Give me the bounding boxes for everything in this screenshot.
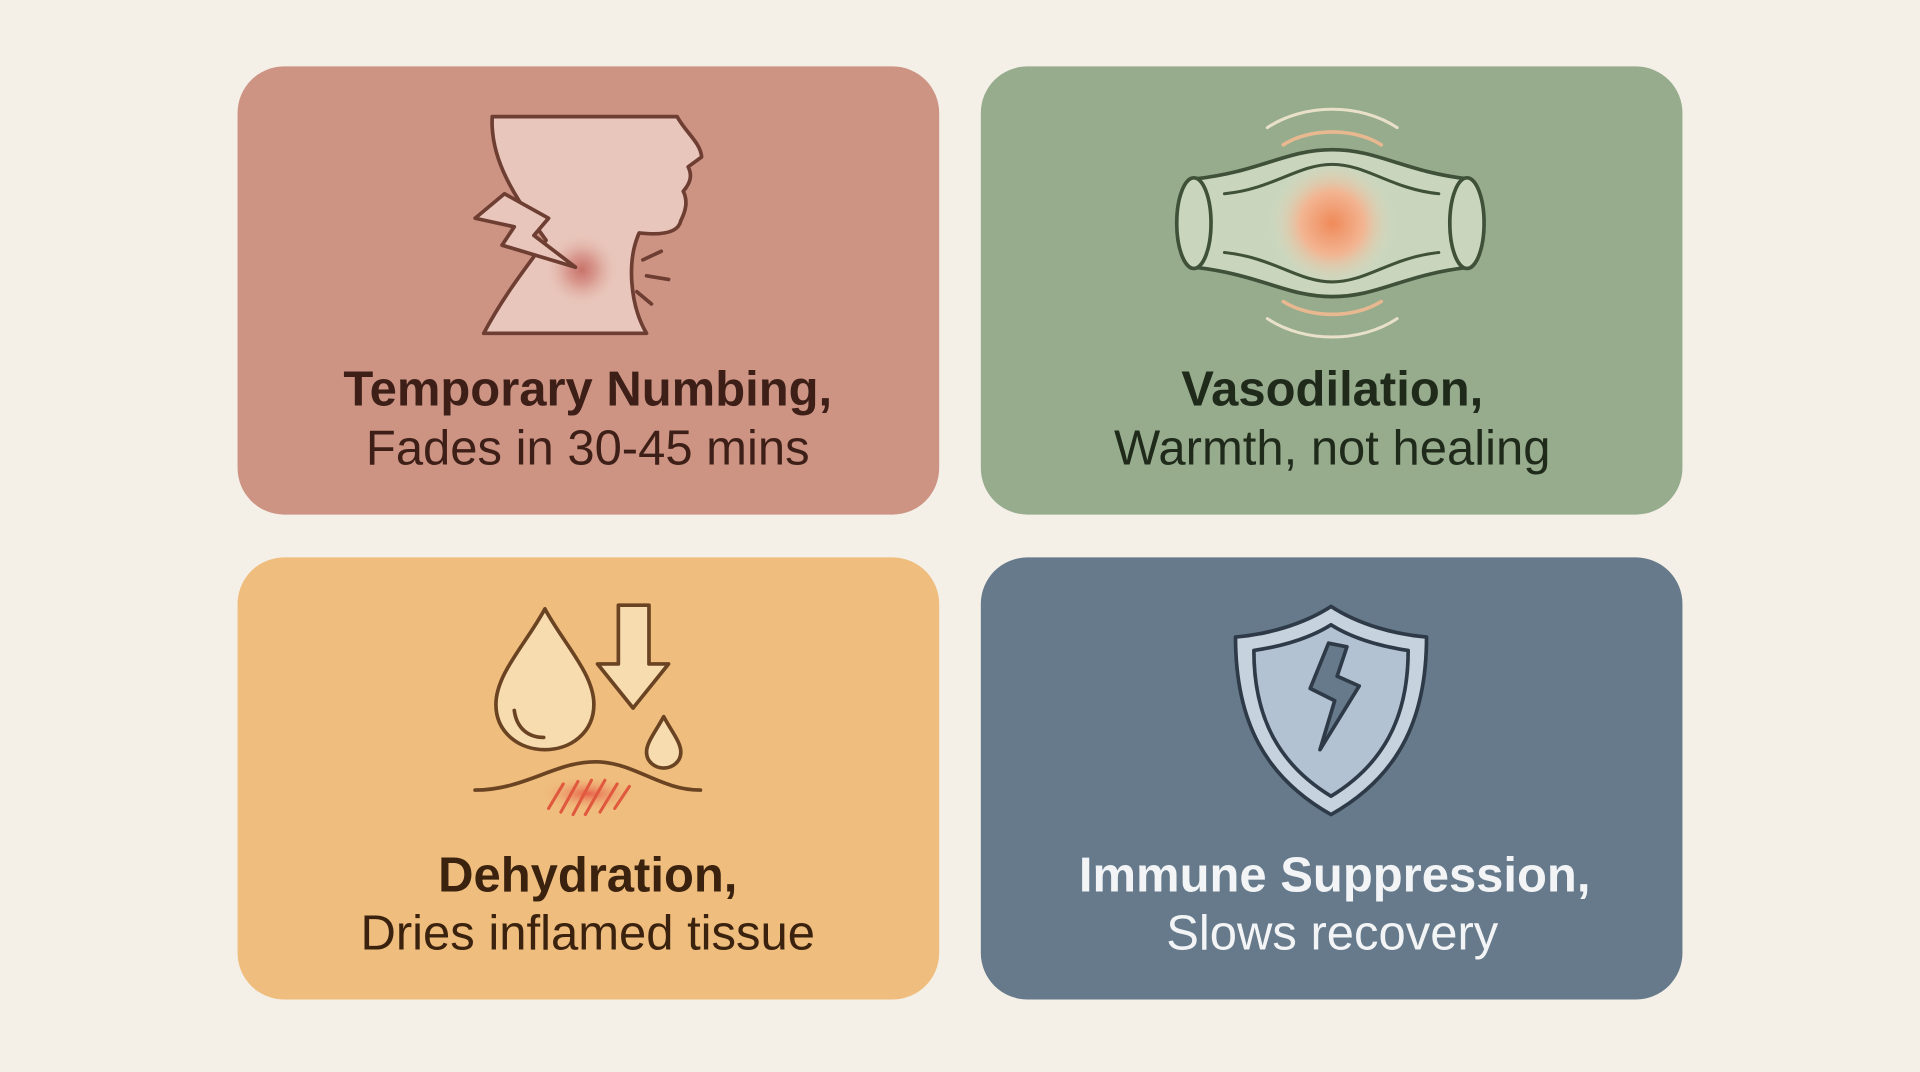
text: numbing: Temporary Numbing, — [343, 363, 832, 417]
icon: drops and dry tissue — [475, 605, 700, 815]
text: immune — [1079, 849, 1590, 960]
text: dehydration — [361, 849, 815, 960]
text: vasodilation: Vasodilation, — [1181, 363, 1483, 417]
icon: neck with pain — [475, 117, 702, 333]
panel: immune suppression — [981, 557, 1682, 999]
text: dehydration: Dries inflamed tissue — [361, 906, 815, 960]
text: numbing — [343, 363, 832, 475]
panel: dehydration — [238, 557, 939, 999]
text: numbing: Fades in 30-45 mins — [366, 421, 810, 475]
panel: vasodilation — [981, 66, 1682, 515]
text: vasodilation — [1114, 363, 1550, 475]
icon: cracked shield — [1236, 606, 1427, 815]
text: immune: Slows recovery — [1166, 906, 1499, 960]
text: vasodilation: Warmth, not healing — [1114, 421, 1550, 475]
text: immune: Immune Suppression, — [1079, 849, 1590, 903]
text: dehydration: Dehydration, — [438, 849, 737, 903]
icon: dilated vessel — [1177, 109, 1484, 337]
panel: temporary numbing — [238, 66, 939, 515]
